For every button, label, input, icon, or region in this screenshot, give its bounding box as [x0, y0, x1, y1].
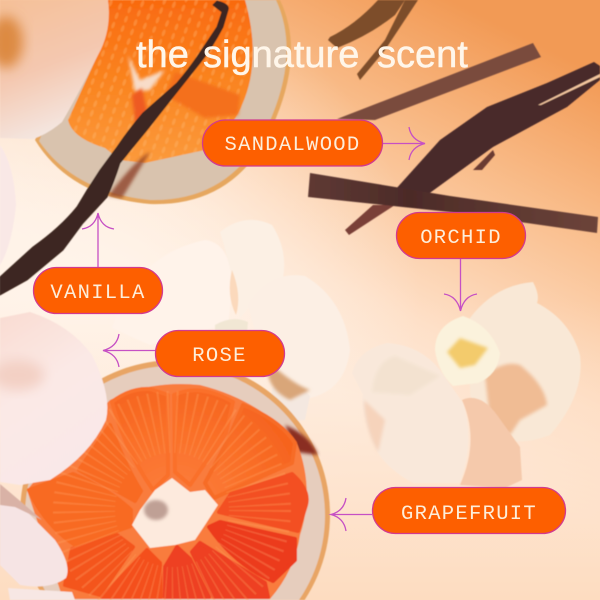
grapefruit centre pith — [132, 478, 218, 548]
bottom grapefruit slice — [20, 360, 330, 600]
grapefruit vein texture — [84, 422, 260, 598]
long lower stick — [308, 173, 598, 233]
grapefruit segments — [29, 389, 307, 597]
label: grapefruit — [331, 488, 566, 534]
centre white orchid — [112, 220, 350, 422]
small sticks at top — [328, 0, 418, 80]
arrow: grapefruit — [331, 498, 372, 531]
bottom left petal — [0, 484, 75, 600]
label: orchid: ORCHID — [420, 227, 502, 250]
label: vanilla: VANILLA — [50, 282, 146, 305]
arrow: sandalwood — [383, 127, 425, 160]
left edge petal — [0, 145, 16, 265]
vanilla bean — [0, 1, 228, 295]
title: the — [136, 34, 189, 76]
top grapefruit slice — [35, 0, 291, 204]
label: orchid — [396, 212, 526, 311]
vanilla bundle stick — [345, 62, 600, 235]
lower petal — [460, 398, 522, 488]
upper right petal — [470, 282, 581, 442]
label: rose: ROSE — [192, 345, 247, 368]
right orchid — [352, 282, 581, 488]
label: sandalwood: SANDALWOOD — [224, 134, 361, 157]
orchid centre — [435, 316, 500, 386]
label: grapefruit: GRAPEFRUIT — [401, 503, 537, 526]
left petal — [352, 343, 468, 483]
arrow: orchid — [444, 259, 477, 311]
arrow: vanilla — [82, 213, 114, 267]
upper left petal — [0, 0, 109, 139]
lower left petal — [0, 312, 107, 485]
label: sandalwood — [202, 120, 425, 166]
label: vanilla — [34, 213, 162, 314]
label: rose — [103, 330, 284, 376]
title: scent — [377, 34, 468, 76]
title: signature — [203, 34, 359, 76]
upper stick — [337, 43, 541, 120]
arrow: rose — [103, 334, 155, 367]
